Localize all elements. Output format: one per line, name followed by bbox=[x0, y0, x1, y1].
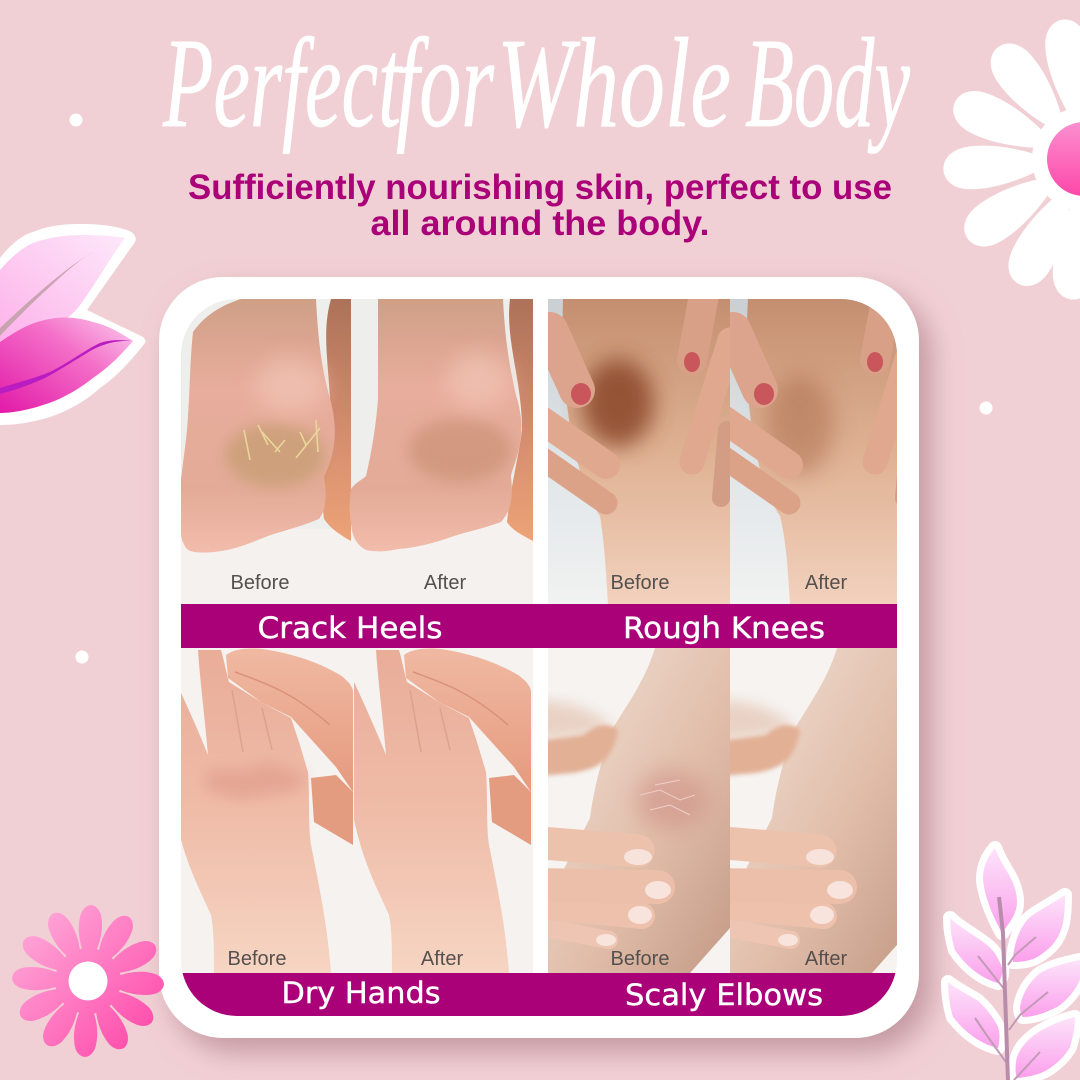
photo labels: before and after: Before bbox=[228, 948, 286, 970]
photo labels: before and after: After bbox=[805, 948, 847, 970]
band: dry hands and scaly elbows: Dry Hands bbox=[282, 976, 440, 1010]
subtitle: Sufficiently nourishing skin, perfect to use bbox=[188, 167, 892, 207]
photo: crack heels before bbox=[181, 299, 351, 604]
photo labels: before and after: After bbox=[805, 572, 847, 594]
grid gutter bbox=[533, 299, 548, 973]
band: dry hands and scaly elbows: Scaly Elbows bbox=[625, 978, 823, 1012]
photo labels: before and after: After bbox=[421, 948, 463, 970]
title: Perfect bbox=[162, 12, 403, 154]
panel: white card bbox=[159, 277, 919, 1038]
band: crack heels and rough knees: Rough Knees bbox=[623, 611, 825, 645]
title: for bbox=[396, 12, 495, 154]
title: Whole bbox=[497, 12, 731, 154]
photo labels: before and after: Before bbox=[611, 572, 669, 594]
photo labels: before and after bbox=[228, 572, 847, 970]
panel: photo grid bbox=[176, 290, 913, 1017]
photo labels: before and after: Before bbox=[611, 948, 669, 970]
photo: scaly elbows after bbox=[730, 648, 897, 973]
title bbox=[162, 12, 910, 154]
photo: crack heels after bbox=[350, 299, 533, 604]
title: Body bbox=[745, 12, 910, 154]
photo: rough knees after bbox=[730, 299, 897, 604]
band: crack heels and rough knees bbox=[181, 604, 897, 648]
background dots bbox=[70, 114, 992, 664]
photo: dry hands after bbox=[353, 648, 533, 973]
icon: white daisy top right bbox=[942, 16, 1080, 301]
icon: leaf sprig bottom right bbox=[948, 848, 1080, 1080]
photo labels: before and after: After bbox=[424, 572, 466, 594]
subtitle: all around the body. bbox=[370, 203, 710, 243]
photo labels: before and after: Before bbox=[231, 572, 289, 594]
band: dry hands and scaly elbows bbox=[181, 973, 897, 1017]
band: crack heels and rough knees: Crack Heels bbox=[258, 611, 442, 645]
photo: scaly elbows before bbox=[530, 648, 730, 973]
photo: dry hands before bbox=[176, 648, 353, 973]
icon: pink flower bottom left bbox=[8, 901, 168, 1061]
icon: pink leaves left bbox=[0, 224, 146, 425]
subtitle bbox=[188, 167, 892, 243]
photo: rough knees before bbox=[548, 299, 730, 604]
